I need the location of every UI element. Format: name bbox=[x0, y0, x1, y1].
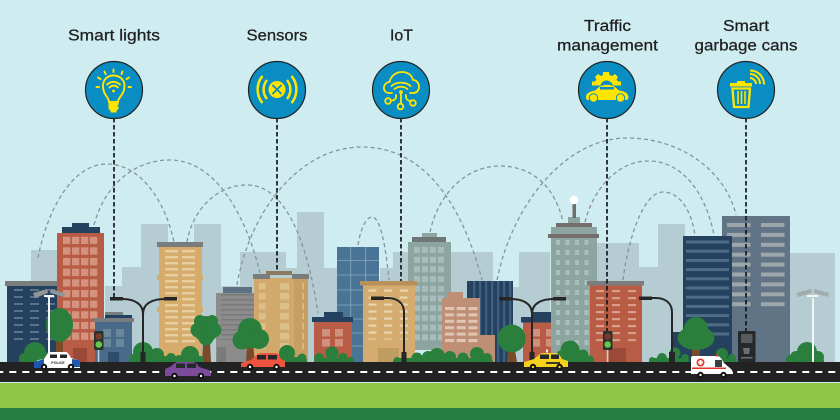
camera pole left bbox=[33, 289, 65, 354]
icon: smart light bulb bbox=[86, 62, 142, 118]
building: red traffic bbox=[587, 281, 644, 362]
building: slate right bbox=[722, 216, 790, 362]
heading: IoT: IoT bbox=[390, 28, 414, 44]
trees and bushes bbox=[19, 308, 824, 368]
building: blue glass bbox=[337, 247, 379, 362]
street lamp: double middle bbox=[499, 297, 566, 362]
building: pink bbox=[442, 292, 495, 362]
red car bbox=[241, 353, 285, 370]
traffic light right bbox=[603, 331, 612, 362]
building: red house right bbox=[521, 312, 562, 362]
heading: Smart garbage cans: garbage cans bbox=[694, 38, 798, 54]
police car: POLICE bbox=[51, 361, 65, 365]
building: tall tan bbox=[157, 242, 203, 362]
building: tower with antenna bbox=[548, 196, 599, 362]
building: navy right bbox=[673, 236, 732, 362]
icon: traffic management bbox=[578, 62, 636, 118]
smart garbage can bbox=[738, 331, 756, 362]
heading: Smart garbage cans: Smart bbox=[723, 18, 770, 35]
ambulance bbox=[691, 354, 733, 378]
heading: Traffic management: management bbox=[557, 38, 659, 54]
purple car bbox=[165, 362, 211, 379]
heading: Sensors: Sensors bbox=[246, 28, 308, 44]
dashed connectivity arcs bbox=[38, 138, 736, 313]
building: tan sensors bbox=[253, 271, 309, 362]
tree 2 bbox=[190, 315, 222, 362]
icon: sensors bbox=[248, 62, 306, 118]
icon: IoT cloud bbox=[372, 62, 430, 118]
tree 3 bbox=[232, 318, 269, 362]
tree 4 bbox=[498, 324, 526, 362]
building: green-gray tall bbox=[408, 233, 451, 350]
heading: Traffic management: Traffic bbox=[584, 18, 631, 35]
street lamp: single right bbox=[639, 296, 675, 362]
camera pole right bbox=[796, 289, 829, 362]
tree 5 bbox=[678, 317, 714, 360]
building: navy left bbox=[5, 281, 62, 362]
traffic light left bbox=[94, 331, 104, 362]
building: gray bbox=[216, 287, 254, 362]
tree 1 bbox=[46, 308, 73, 362]
street lamp: double left bbox=[110, 297, 177, 362]
grass bbox=[0, 383, 840, 408]
background skyline bbox=[31, 212, 835, 362]
police car bbox=[34, 352, 80, 370]
taxi bbox=[524, 350, 568, 370]
dashed drop lines bbox=[114, 118, 746, 331]
building: navy striped bbox=[467, 281, 513, 362]
heading: Smart lights: Smart lights bbox=[68, 28, 160, 44]
building: small blue bbox=[93, 312, 134, 362]
road bbox=[0, 362, 840, 382]
building: tall red bbox=[57, 223, 104, 362]
roadside bushes bbox=[19, 340, 824, 368]
dark grass strip bbox=[0, 408, 840, 420]
building: tan IoT bbox=[360, 281, 417, 362]
street lamp: single IoT bbox=[371, 296, 406, 362]
building: small red house bbox=[312, 312, 353, 362]
icon: smart garbage can bbox=[718, 62, 774, 118]
